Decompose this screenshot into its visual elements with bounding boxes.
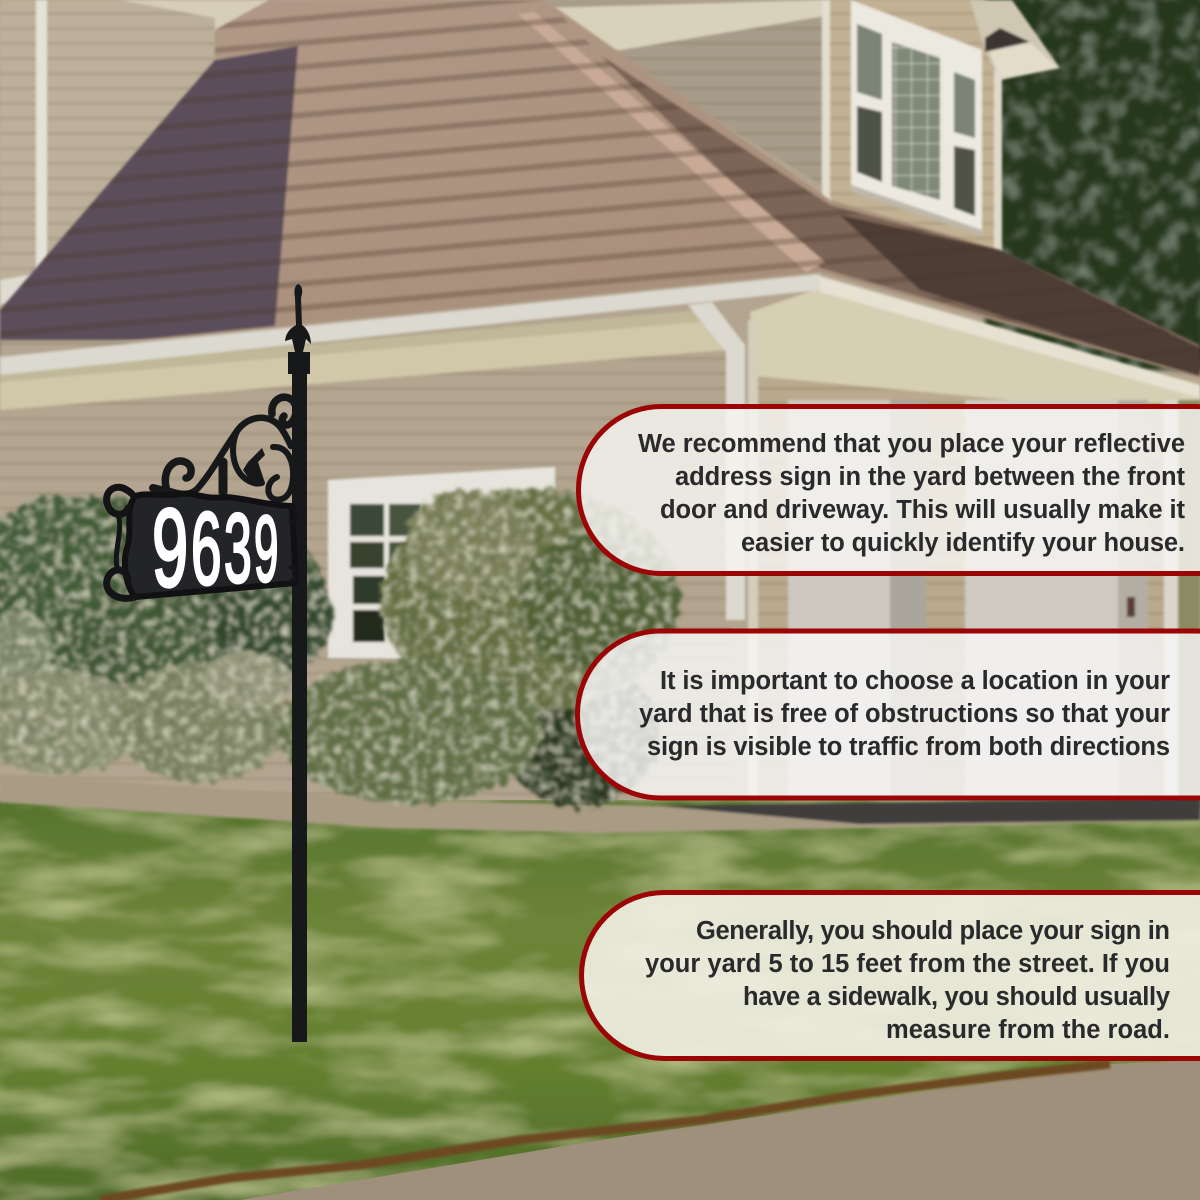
text: placement recommendation: We recommend that you place your reflective [638,430,1185,458]
house number 9639: 3 [224,495,252,603]
upper windows [851,0,982,230]
lawn [0,800,1200,1200]
text: clear location: yard that is free of obstructions so that your [639,700,1170,728]
house upper wall [0,0,1060,305]
text: placement recommendation: address sign in the yard between the front [675,463,1186,491]
text: clear location [639,667,1170,761]
house number 9639: 9 [254,496,278,601]
scrollwork bracket [153,397,296,500]
text: distance from street: Generally, you should place your sign in [696,917,1170,945]
backdrop wall [0,0,1200,810]
house number 9639: 6 [191,492,222,606]
roof shadow [0,46,298,354]
right dark roof [600,55,1200,376]
sign panel [107,487,296,598]
text: distance from street: have a sidewalk, you should usually [743,983,1171,1011]
lower window [328,467,555,660]
product: reflective address sign on post [107,284,311,1042]
text: placement recommendation: easier to quickly identify your house. [741,529,1185,557]
scrollwork ornament [243,448,265,483]
walkway [0,774,1200,833]
text: clear location: sign is visible to traffic from both directions [647,733,1170,761]
text: distance from street: measure from the road. [886,1016,1170,1044]
text: placement recommendation: door and driveway. This will usually make it [660,496,1186,524]
trees [985,0,1200,370]
text: distance from street [645,917,1171,1044]
garage doors [788,400,890,800]
house number 9639: 9 [152,487,188,610]
text: distance from street: your yard 5 to 15 feet from the street. If you [645,950,1170,978]
driveway [100,1060,1200,1200]
panel: distance from street [582,892,1200,1058]
text: clear location: It is important to choose a location in your [660,667,1170,695]
bushes [0,488,680,807]
lower wall, soffit and gutter [0,274,1200,810]
text: placement recommendation [638,430,1186,557]
panel: placement recommendation [578,406,1200,574]
ridge cap [518,12,825,272]
house number 9639 [152,487,278,610]
panel: clear location [578,631,1200,798]
roof [0,0,1200,378]
post and finial [285,284,311,1042]
